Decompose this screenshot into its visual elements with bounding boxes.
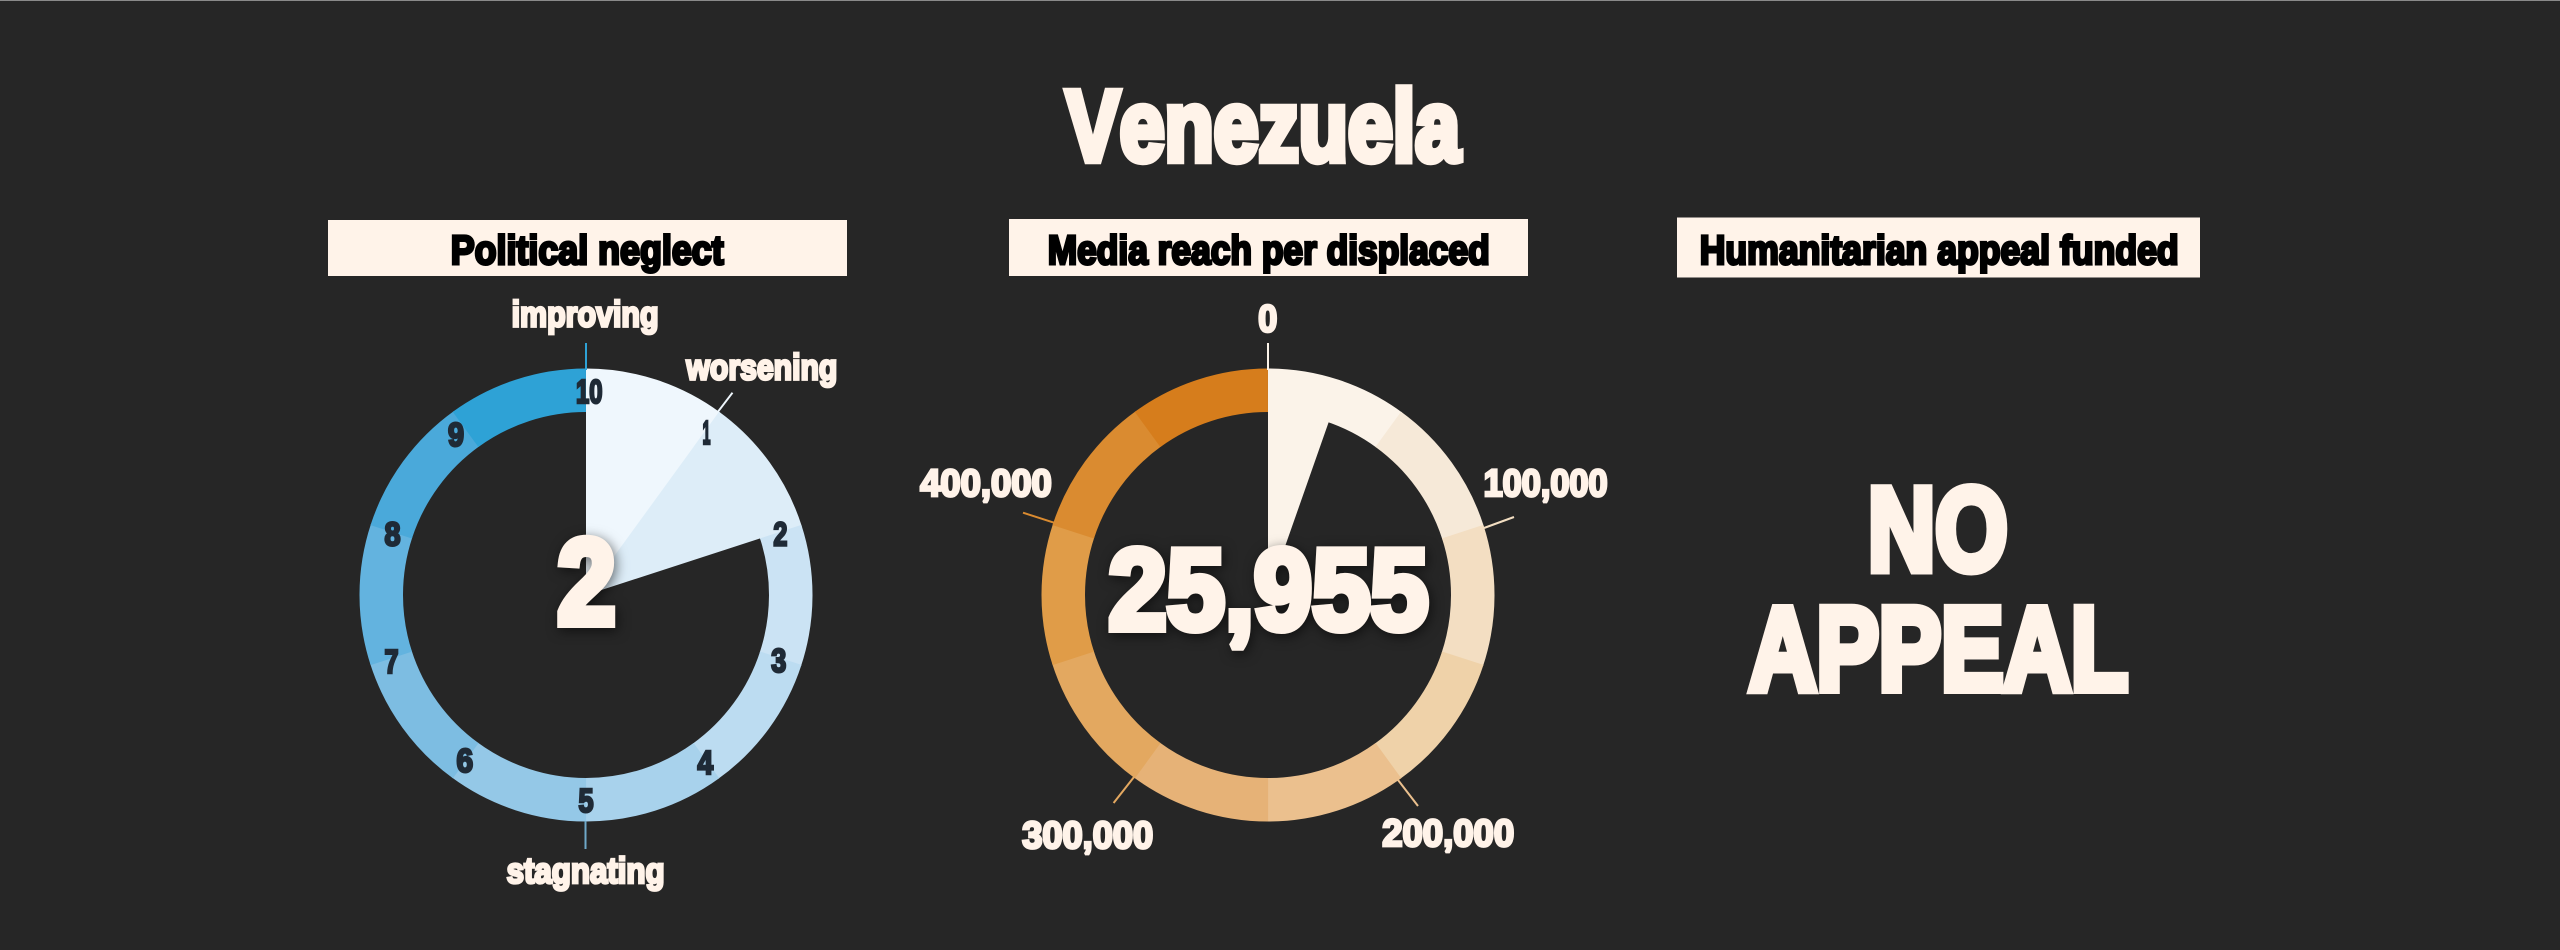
scale numbers 1 to 10: 8 — [384, 516, 400, 553]
gauge: media reach ring — [982, 309, 1554, 881]
label: stagnating: stagnating — [507, 850, 665, 891]
label: 400,000: 400,000 — [920, 463, 1052, 505]
gauge: political neglect ring — [300, 309, 872, 881]
label: 100,000: 100,000 — [1484, 463, 1608, 505]
scale numbers 1 to 10: 4 — [698, 744, 714, 781]
big value: 25,955: 25,955 — [1108, 527, 1428, 654]
scale numbers 1 to 10: 5 — [578, 782, 594, 819]
big text: no appeal: APPEAL — [1749, 584, 2128, 716]
scale numbers 1 to 10: 3 — [771, 642, 786, 679]
scale numbers 1 to 10: 2 — [773, 516, 787, 553]
label: 200,000 — [1382, 780, 1514, 855]
value wedge: score 2 — [586, 409, 763, 595]
label: 200,000: 200,000 — [1382, 813, 1514, 855]
heading: political neglect — [328, 220, 847, 276]
scale numbers 1 to 10: 6 — [456, 742, 473, 779]
label: 100,000 — [1484, 463, 1608, 528]
label: 0: 0 — [1258, 298, 1277, 340]
title: Venezuela — [1066, 70, 1461, 182]
panel: humanitarian appeal funded — [1677, 218, 2200, 716]
label: 400,000 — [920, 463, 1054, 523]
label: worsening — [686, 346, 837, 412]
big text: no appeal: NO — [1868, 464, 2008, 596]
value wedge: 25,955 — [1268, 409, 1330, 595]
panel: media reach per displaced — [920, 219, 1608, 881]
heading: media reach: Media reach per displaced — [1048, 227, 1490, 273]
panel: political neglect — [300, 220, 872, 891]
scale numbers 1 to 10: 7 — [384, 643, 398, 680]
scale numbers 1 to 10: 1 — [702, 414, 710, 451]
label: worsening: worsening — [686, 346, 837, 388]
label: 300,000: 300,000 — [1022, 815, 1153, 857]
heading: humanitarian appeal — [1677, 218, 2200, 278]
label: 300,000 — [1022, 777, 1153, 857]
label: 0 — [1258, 298, 1277, 370]
heading: humanitarian appeal: Humanitarian appeal funded — [1700, 227, 2179, 273]
scale numbers 1 to 10: 10 — [576, 373, 602, 410]
scale numbers 1 to 10: 9 — [448, 416, 464, 453]
big text: no appeal — [1749, 464, 2128, 716]
big value: 2: 2 — [558, 514, 616, 650]
label: improving: improving — [512, 294, 659, 334]
heading: political neglect: Political neglect — [451, 227, 724, 273]
scale numbers 1 to 10 — [384, 373, 787, 819]
